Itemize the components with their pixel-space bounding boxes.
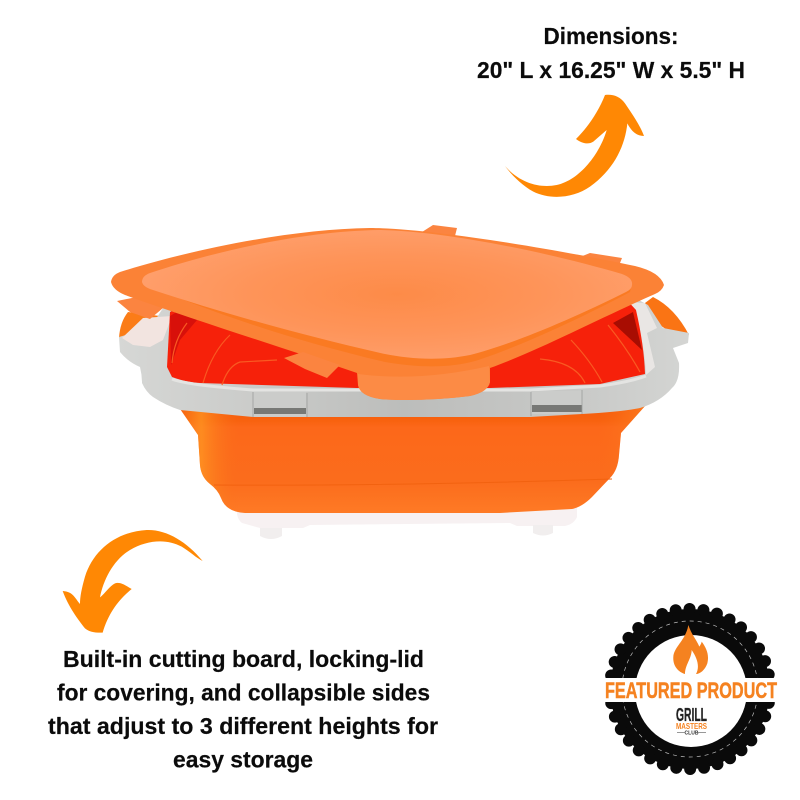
logo: grill masters club: CLUB [685, 730, 699, 736]
arrow: up toward dimensions [505, 95, 644, 197]
cutting board base and feet [237, 505, 577, 539]
badge: featured product [600, 609, 780, 769]
text block: product description: easy storage [173, 746, 313, 772]
text block: product description: that adjust to 3 different heights for [48, 713, 438, 739]
handles [119, 297, 689, 338]
heading: dimensions [477, 23, 745, 83]
text block: product description: for covering, and collapsible sides [57, 680, 430, 706]
logo: grill masters club: MASTERS [676, 721, 707, 731]
latches [117, 225, 622, 319]
lid [111, 228, 664, 400]
heading: dimensions: Dimensions: [544, 23, 678, 49]
heading: dimensions: 20" L x 16.25" W x 5.5" H [477, 57, 745, 83]
basin interior [167, 298, 645, 388]
logo: grill masters club: GRILL [676, 705, 707, 725]
arrow: down toward description [63, 530, 203, 633]
rim front and slots [172, 376, 646, 417]
text block: product description [48, 646, 438, 772]
icon: flame [673, 625, 708, 674]
logo: grill masters club [676, 705, 707, 736]
rim [119, 298, 689, 417]
front latch [284, 352, 340, 378]
scalloped seal [600, 609, 780, 769]
tub body [178, 406, 645, 513]
product: collapsible tub with lid [111, 225, 689, 539]
text block: product description: Built-in cutting board, locking-lid [63, 646, 424, 672]
